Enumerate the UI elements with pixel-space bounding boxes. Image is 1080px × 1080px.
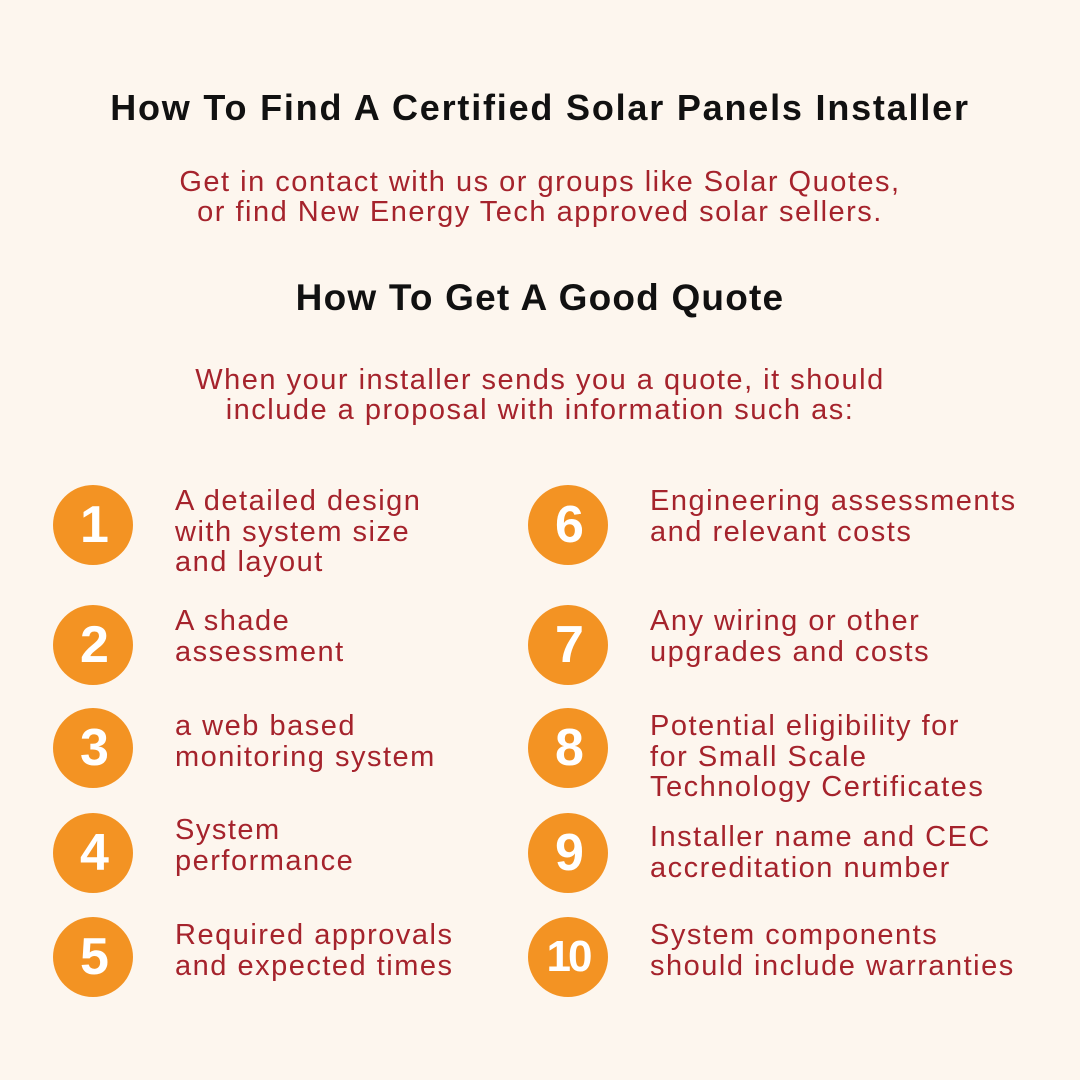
intro text: [179, 166, 901, 228]
item 8: [528, 708, 984, 803]
item 4: System: [175, 814, 281, 846]
item 10: [528, 917, 1015, 997]
item 6: Engineering assessments: [650, 485, 1017, 517]
quote intro text: include a proposal with information such as:: [226, 394, 854, 426]
item 10: System components: [650, 919, 938, 951]
item 9: accreditation number: [650, 852, 951, 884]
item 9: Installer name and CEC: [650, 821, 991, 853]
item 8: 8: [555, 719, 581, 777]
item 3: monitoring system: [175, 740, 436, 772]
item 1: A detailed design: [175, 485, 421, 517]
item 1: 1: [80, 496, 106, 554]
quote intro text: When your installer sends you a quote, it should: [195, 364, 885, 396]
item 3: 3: [80, 719, 106, 777]
item 3: a web based: [175, 710, 356, 742]
heading: good quote: How To Get A Good Quote: [296, 277, 784, 318]
item 6: [528, 485, 1017, 565]
item 7: upgrades and costs: [650, 636, 930, 668]
item 2: assessment: [175, 636, 345, 668]
item 6: and relevant costs: [650, 516, 912, 548]
item 2: [53, 605, 345, 685]
item 7: Any wiring or other: [650, 605, 920, 637]
item 2: A shade: [175, 605, 290, 637]
item 9: 9: [555, 824, 581, 882]
item 6: 6: [555, 496, 581, 554]
item 8: for Small Scale: [650, 740, 868, 772]
item 2: 2: [80, 616, 106, 674]
item 4: [53, 813, 354, 893]
intro text: or find New Energy Tech approved solar sellers.: [197, 196, 883, 228]
item 5: and expected times: [175, 950, 453, 982]
item 1: and layout: [175, 546, 324, 578]
item 4: 4: [80, 824, 106, 882]
item 8: Potential eligibility for: [650, 710, 960, 742]
item 4: performance: [175, 844, 354, 876]
item 5: Required approvals: [175, 919, 453, 951]
item 10: should include warranties: [650, 950, 1015, 982]
item 1: with system size: [175, 516, 410, 548]
intro text: Get in contact with us or groups like Solar Quotes,: [179, 166, 901, 198]
item 7: [528, 605, 930, 685]
item 1: [53, 485, 421, 578]
item 10: 10: [547, 932, 589, 981]
item 9: [528, 813, 991, 893]
item 7: 7: [555, 616, 581, 674]
title: How To Find A Certified Solar Panels Installer: [110, 87, 970, 128]
item 3: [53, 708, 436, 788]
item 5: [53, 917, 453, 997]
item 8: Technology Certificates: [650, 771, 984, 803]
item 5: 5: [80, 928, 106, 986]
quote intro text: [195, 364, 885, 426]
